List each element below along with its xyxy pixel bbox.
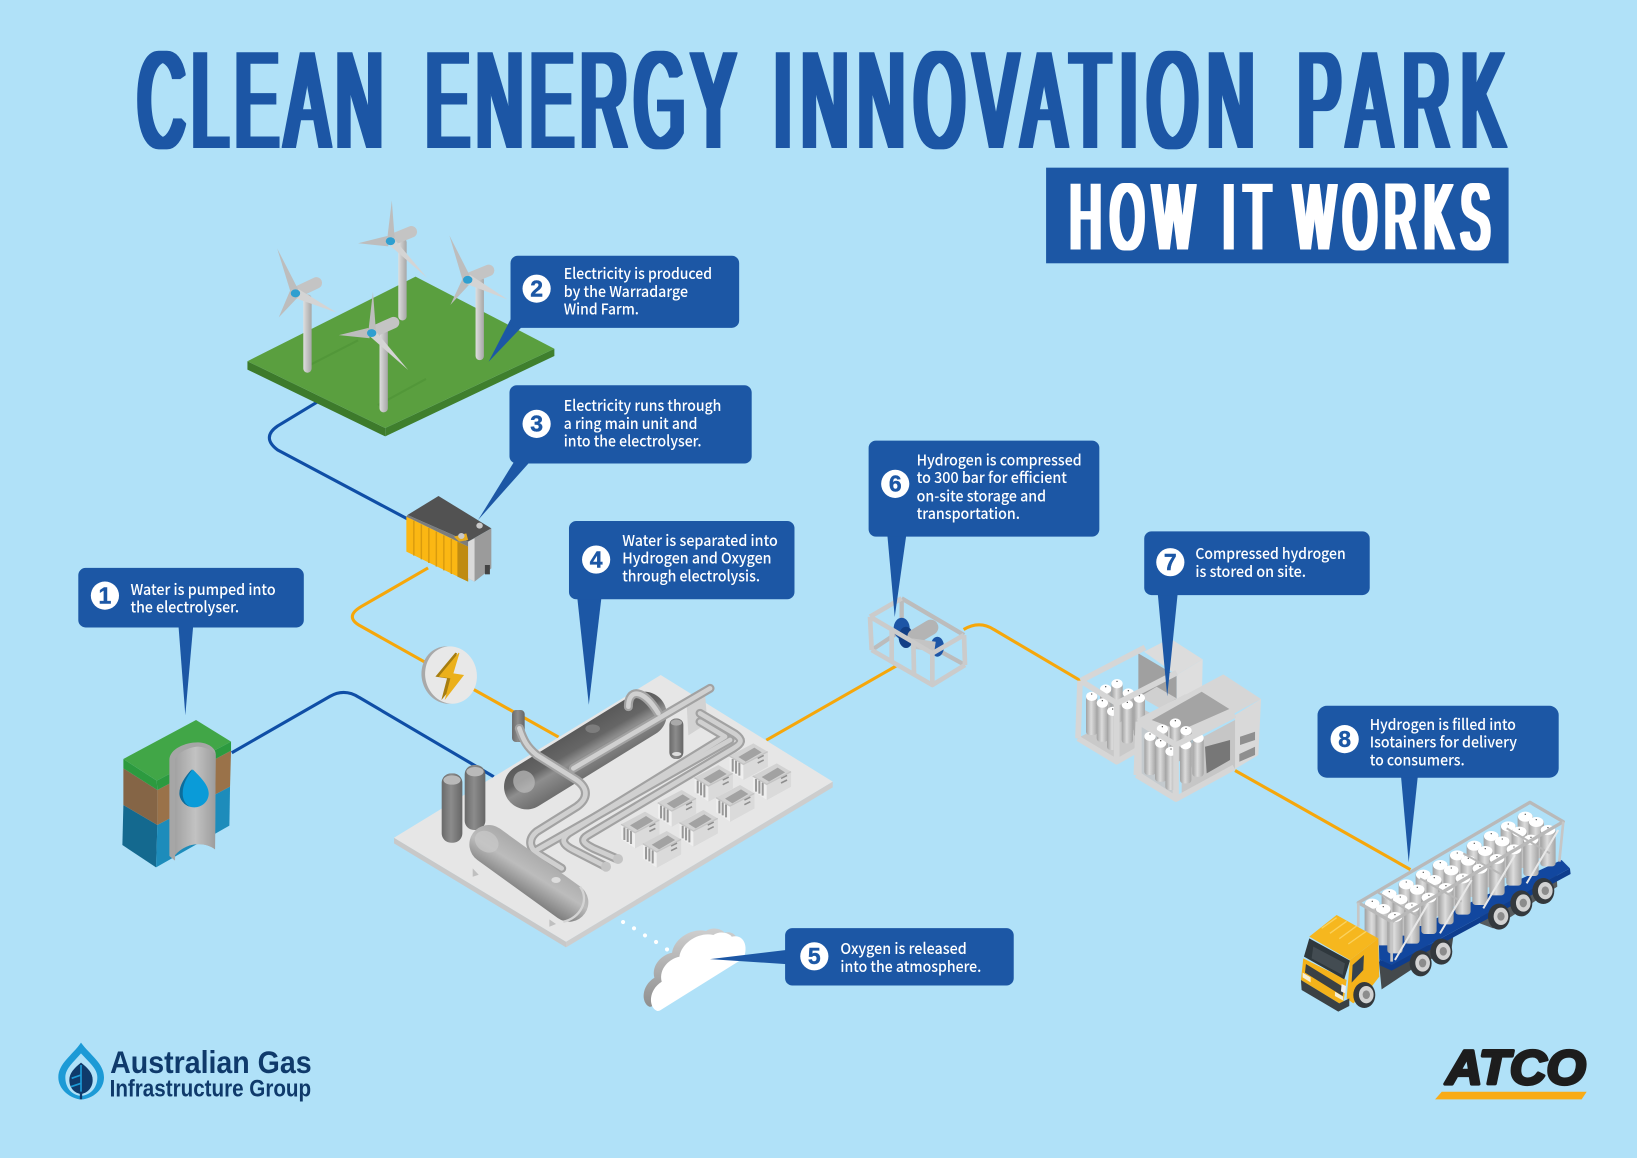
icon: water bore <box>122 720 231 867</box>
process pipes <box>519 688 741 872</box>
callout 4: 4 <box>590 546 603 572</box>
callout 3: Electricity runs through <box>564 394 721 416</box>
storage unit front <box>1136 674 1261 801</box>
wheels <box>1410 878 1554 976</box>
chassis <box>1379 875 1557 989</box>
callout 2: by the Warradarge <box>564 280 688 302</box>
callout 3: into the electrolyser. <box>564 430 702 452</box>
subtitle banner: IT <box>1223 166 1271 270</box>
icon: cloud <box>644 928 746 1011</box>
callout 1: Water is pumped into <box>131 578 276 600</box>
subtitle banner: HOW <box>1070 166 1194 270</box>
callout 7: 7 <box>1164 549 1177 575</box>
title: ENERGY <box>426 23 735 177</box>
subtitle banner <box>1046 166 1509 270</box>
oxygen dots <box>621 920 669 951</box>
icon: compressor <box>870 598 965 685</box>
callout 2: 2 <box>530 275 543 301</box>
icon: wind farm <box>247 200 554 436</box>
callout 5: into the atmosphere. <box>840 955 981 977</box>
callout 8: Hydrogen is filled into <box>1370 713 1516 735</box>
callout 7: is stored on site. <box>1195 560 1306 582</box>
callout 6: transportation. <box>917 502 1020 524</box>
light oxygen tank <box>471 826 584 927</box>
icon: power bolt disc <box>416 642 482 709</box>
callout 2: Electricity is produced <box>564 262 712 284</box>
hydrogen cylinders <box>1365 812 1556 953</box>
logo: ATCO: ATCO <box>1445 1042 1586 1095</box>
connecting pipelines and cables <box>232 402 1410 870</box>
truck cab <box>1301 915 1379 1012</box>
callout 3: a ring main unit and <box>564 412 697 434</box>
title: PARK <box>1298 23 1504 177</box>
icon: hydrogen storage <box>1077 638 1261 801</box>
callout 8: 8 <box>1338 726 1351 752</box>
callout 6: 6 <box>889 471 902 497</box>
logo: Australian Gas Infrastructure Group <box>58 1043 312 1103</box>
callout 4 <box>569 521 794 705</box>
callout 2: Wind Farm. <box>564 298 639 320</box>
callout 6 <box>869 441 1099 617</box>
callout 6: Hydrogen is compressed <box>917 448 1082 470</box>
callout 6: on-site storage and <box>917 484 1046 506</box>
callout 2 <box>489 256 739 362</box>
small vessels <box>442 710 683 843</box>
callout 8: Isotainers for delivery <box>1370 731 1518 753</box>
callout 3 <box>478 385 752 520</box>
callout 1: 1 <box>99 582 112 608</box>
callout 7 <box>1144 531 1370 696</box>
callout 5 <box>710 928 1014 986</box>
logo: Australian Gas Infrastructure Group: Australian Gas <box>110 1045 312 1080</box>
title: INNOVATION <box>774 23 1254 177</box>
callout 7: Compressed hydrogen <box>1195 542 1346 564</box>
callout 5: Oxygen is released <box>840 937 967 959</box>
callout 8 <box>1318 706 1559 862</box>
title: CLEAN <box>138 23 383 177</box>
icon: electrolyser plant <box>394 675 833 947</box>
subtitle banner: WORKS <box>1294 166 1490 270</box>
callout 6: to 300 bar for efficient <box>917 466 1067 488</box>
logo: Australian Gas Infrastructure Group: Infrastructure Group <box>110 1076 311 1103</box>
container frame <box>1358 802 1563 962</box>
icon: ring main unit battery <box>406 496 491 582</box>
callout 1 <box>78 568 304 715</box>
callout 5: 5 <box>808 943 821 969</box>
storage unit back <box>1077 638 1203 762</box>
title <box>138 23 1504 177</box>
callout 1: the electrolyser. <box>131 596 239 618</box>
callout 4: Water is separated into <box>622 529 778 551</box>
electrolyser stacks <box>621 743 791 868</box>
callout 3: 3 <box>530 411 543 437</box>
callout 4: Hydrogen and Oxygen <box>622 547 772 569</box>
callout 4: through electrolysis. <box>622 564 760 586</box>
icon: truck with isotainer <box>1301 802 1571 1012</box>
callout 8: to consumers. <box>1370 748 1465 770</box>
trailer deck <box>1379 860 1571 971</box>
dark hydrogen tank <box>509 714 644 797</box>
